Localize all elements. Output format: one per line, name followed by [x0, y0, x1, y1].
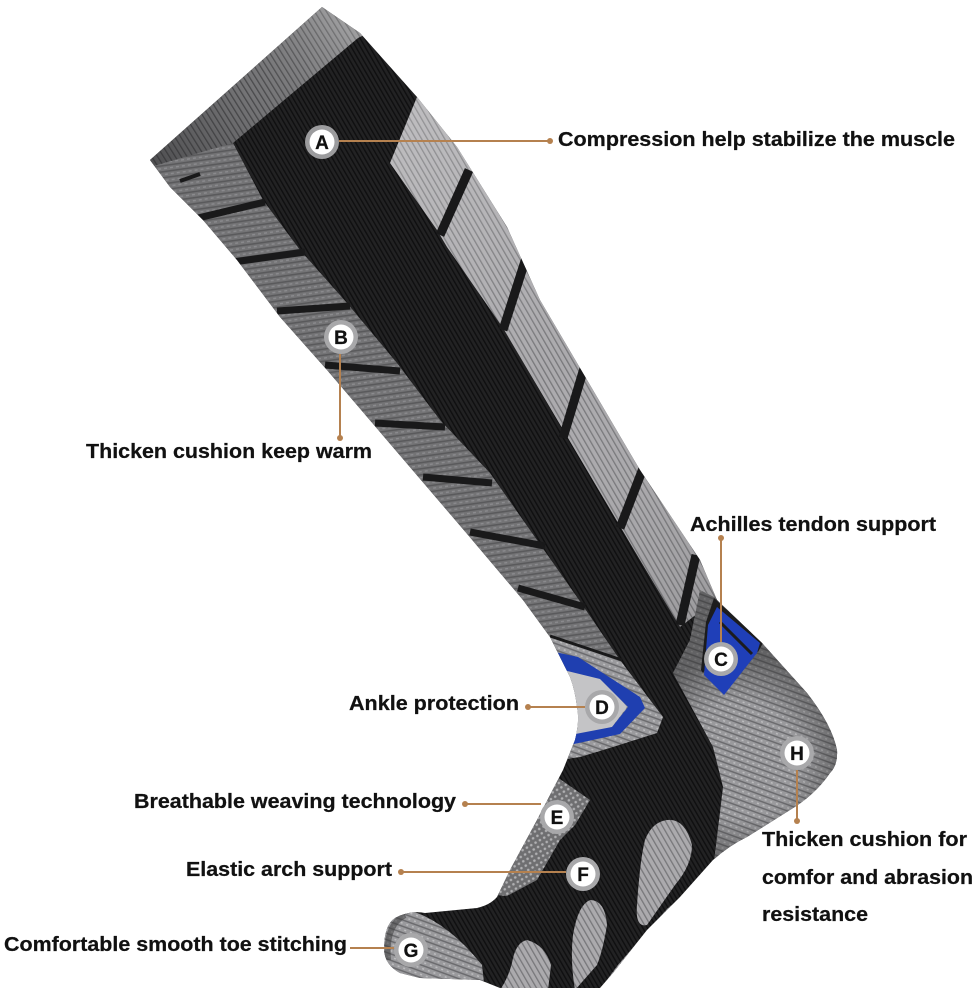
breathable mesh panel [495, 777, 590, 896]
callout G: Comfortable smooth toe stitching [4, 933, 347, 956]
callout H: Thicken cushion for [762, 828, 967, 851]
sole patch 2 [572, 900, 607, 990]
right panel shading [390, 97, 740, 627]
right calf panel [390, 97, 740, 627]
sole patch 3 [500, 940, 551, 990]
heel edge shading [673, 590, 838, 859]
callout B: Thicken cushion keep warm [86, 440, 372, 463]
callout C: C [714, 650, 728, 671]
callout B: B [334, 328, 348, 349]
ankle top seam [550, 636, 622, 660]
callout H: H [790, 744, 804, 765]
ankle panel [549, 636, 663, 759]
callout G: G [404, 941, 418, 962]
callout C [690, 513, 936, 676]
achilles blue panel [704, 607, 760, 695]
callout C: Achilles tendon support [690, 513, 936, 536]
achilles stripes [720, 622, 752, 654]
right calf slashes [440, 170, 696, 625]
callout H: resistance [762, 903, 868, 926]
callout F: F [577, 865, 589, 886]
callout A [305, 125, 955, 159]
callout A: A [315, 133, 329, 154]
calf slashes [180, 174, 585, 607]
heel panel [673, 590, 838, 859]
toe panel [384, 912, 484, 982]
left calf panel [140, 143, 620, 660]
callout E: Breathable weaving technology [134, 790, 457, 813]
cuff band [150, 7, 362, 166]
callout B [86, 320, 372, 463]
sock illustration [140, 0, 850, 992]
callout H [762, 736, 973, 926]
sole patch 1 [637, 820, 692, 925]
callout D [349, 690, 619, 724]
achilles black border [701, 598, 763, 673]
callout D: Ankle protection [349, 692, 519, 715]
ankle blue chevron [555, 652, 645, 746]
sock base silhouette [150, 7, 837, 988]
callout D: D [595, 698, 609, 719]
cuff shading [150, 7, 362, 166]
sock patterned panels [140, 0, 850, 992]
callout F [186, 857, 600, 891]
callout E [134, 790, 574, 834]
callout F: Elastic arch support [186, 858, 392, 881]
toe shading [388, 915, 405, 960]
callout E: E [551, 808, 563, 829]
callout H: comfor and abrasion [762, 866, 973, 889]
callout A: Compression help stabilize the muscle [558, 128, 955, 151]
sole outer gray strip [606, 904, 673, 981]
ankle inner ribbing [566, 670, 627, 737]
callout G [4, 933, 428, 967]
